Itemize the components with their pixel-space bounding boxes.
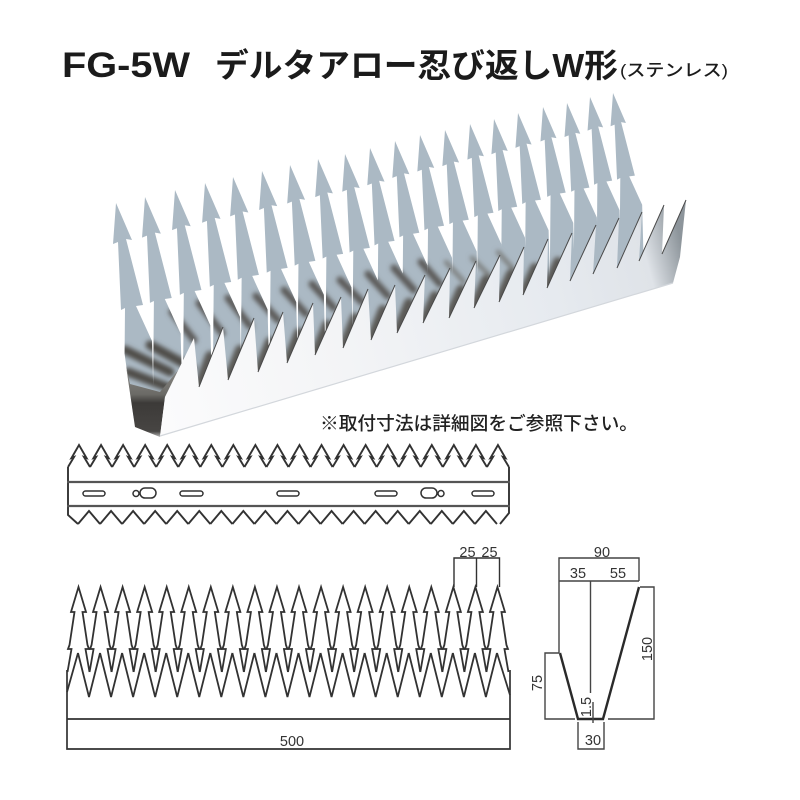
section dimension labels: 150 bbox=[640, 637, 656, 661]
section dimension labels: 30 bbox=[585, 733, 601, 749]
section dimension labels: 35 bbox=[570, 566, 586, 582]
dimension 500 label: 500 bbox=[280, 734, 304, 750]
back sheet arrows bbox=[113, 93, 644, 418]
mounting slots bbox=[83, 488, 494, 498]
product name: デルタアロー忍び返しW形 bbox=[215, 47, 618, 84]
title bbox=[62, 46, 728, 85]
section dimension labels bbox=[530, 545, 656, 749]
plan view drawing with slots bbox=[67, 445, 510, 524]
bottom zigzag bbox=[78, 511, 497, 524]
dimension lines 25 bbox=[454, 558, 500, 587]
section profile bbox=[560, 587, 639, 719]
material note: (ステンレス) bbox=[620, 61, 728, 80]
model number: FG-5W bbox=[62, 46, 190, 85]
plate outline and fold lines bbox=[68, 467, 509, 524]
front elevation drawing bbox=[67, 558, 510, 749]
section dimension labels: 55 bbox=[610, 566, 626, 582]
bottom edge shade bbox=[160, 283, 673, 436]
section dimension labels: 1.5 bbox=[579, 697, 595, 717]
dimension 25 labels bbox=[459, 545, 498, 561]
tooth edges bbox=[199, 200, 686, 387]
plate outline bbox=[67, 670, 510, 749]
inner dark corner bbox=[126, 366, 180, 437]
dimension 25 labels: 25 bbox=[481, 545, 498, 561]
top tree-shaped teeth bbox=[68, 445, 509, 467]
left mask outside sheet bbox=[100, 343, 150, 445]
installation note: ※取付寸法は詳細図をご参照下さい。 bbox=[320, 413, 638, 434]
front toothed sheet bbox=[160, 200, 686, 436]
section dimension labels: 75 bbox=[530, 675, 546, 691]
dimension lines bbox=[559, 558, 639, 693]
lower zigzag bbox=[67, 653, 510, 697]
arrow profile row bbox=[68, 587, 508, 672]
dimension 25 labels: 25 bbox=[459, 545, 476, 561]
section dimension labels: 90 bbox=[594, 545, 610, 561]
cross-section drawing bbox=[545, 558, 654, 749]
product photo: stainless steel arrow spikes bbox=[100, 85, 686, 445]
